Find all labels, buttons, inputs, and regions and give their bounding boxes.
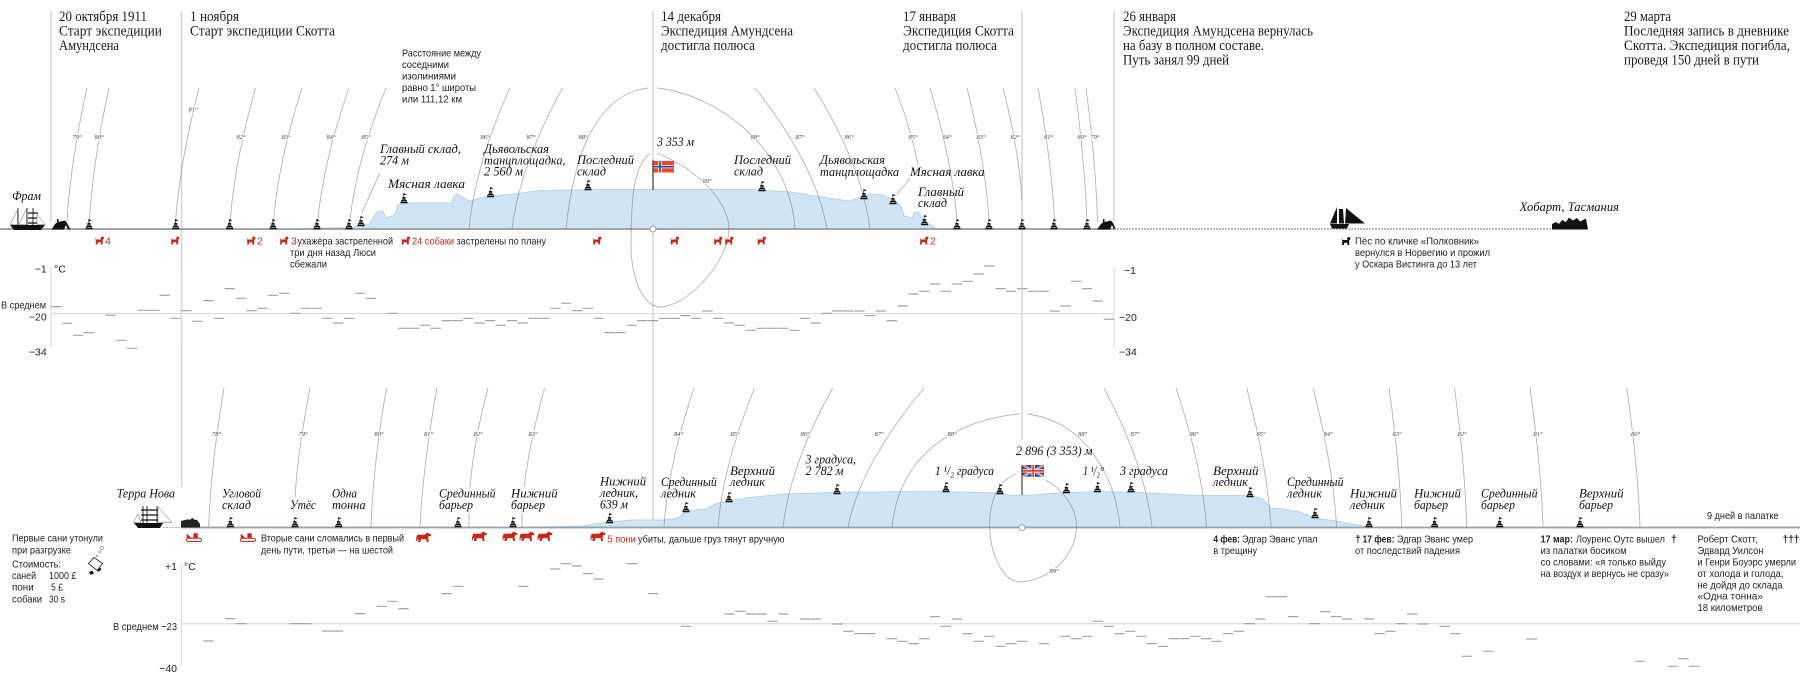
- heading: 14 декабря: Экспедиция Амундсена: [661, 24, 793, 40]
- note: sunk sledge and costs: [12, 533, 104, 605]
- latitude labels: Scott: 87°: [874, 431, 884, 438]
- chart: Scott temperature: [113, 561, 1800, 675]
- latitude labels: Amundsen: 84°: [326, 134, 336, 141]
- latitude isolines: Scott: [209, 388, 1640, 582]
- latitude labels: Scott: 82°: [473, 431, 483, 438]
- heading: 17 января: достигла полюса: [903, 38, 998, 54]
- baseline: Scott: [181, 526, 1800, 528]
- axis labels: Amundsen temperature: [1, 264, 1137, 358]
- dog losses row: Amundsen: сбежали: [290, 258, 327, 270]
- icon: Norway flag: [653, 160, 674, 190]
- note: sunk sledge and costs: Первые сани утонули: [12, 533, 103, 545]
- route place names: Scott: барьер: [1414, 498, 1448, 512]
- route place names: Scott: ледник: [1286, 486, 1322, 500]
- note: 17 March: из палатки босиком: [1541, 545, 1627, 557]
- note: dog Colonel: вернулся в Норвегию и прожил: [1355, 247, 1490, 259]
- latitude labels: Amundsen: 87°: [526, 134, 536, 141]
- latitude labels: Amundsen: 86°: [480, 134, 490, 141]
- route place names: Scott: 2 782 м: [806, 464, 844, 478]
- temperature dashes left part: [51, 289, 604, 348]
- route place names: Scott: Срединный: [439, 487, 496, 501]
- axis labels: Amundsen temperature: −1: [35, 264, 47, 276]
- note: 4 February: в трещину: [1213, 545, 1258, 557]
- dog losses row: Amundsen: 3: [291, 236, 297, 248]
- heading: 20 октября 1911: Старт экспедиции: [59, 24, 162, 40]
- axis labels: Amundsen temperature: −20: [1119, 312, 1137, 324]
- icon: base hut right: [1097, 219, 1116, 230]
- note: sunk sledge and costs: при разгрузке: [12, 544, 71, 556]
- note: 4 February: Эдгар Эванс упал: [1242, 533, 1318, 545]
- route place names: Amundsen: танцплощадка,: [484, 154, 566, 168]
- latitude labels: Amundsen: 88°: [578, 134, 588, 141]
- route place names: Scott: 3 градуса: [1119, 464, 1168, 478]
- latitude labels: Scott: 86°: [1189, 431, 1199, 438]
- heading: 1 ноября: Старт экспедиции Скотта: [190, 24, 336, 40]
- heading: 20 октября 1911: Амундсена: [59, 38, 119, 54]
- route place names: Amundsen: склад: [918, 196, 947, 210]
- note: 17 March: на воздух и вернусь не сразу»: [1541, 568, 1669, 580]
- latitude labels: Scott: 89°: [1049, 568, 1059, 575]
- heading: 17 января: Экспедиция Скотта: [903, 24, 1015, 40]
- route place names: Scott: 2 896 (3 353) м: [1016, 444, 1093, 458]
- note: 17 February: †: [1355, 533, 1361, 545]
- note: distance between isolines: изолиниями: [402, 70, 456, 82]
- route place names: Scott: 1 ¹/₂ градуса: [935, 464, 994, 478]
- heading: 20 октября 1911: 20 октября 1911: [59, 9, 147, 25]
- route place names: Amundsen: Главный: [917, 185, 965, 199]
- icon: ship Terra Nova: [133, 506, 181, 528]
- axis labels: Amundsen temperature: −34: [29, 346, 47, 358]
- heading: 20 октября 1911: [59, 9, 162, 54]
- dog losses row: Amundsen: 2: [930, 236, 936, 248]
- sledge and pony losses: [186, 532, 785, 556]
- icon: base hut left: [52, 219, 70, 230]
- icon: ship Fram: [0, 208, 51, 230]
- icon: ship returning: [1330, 207, 1365, 228]
- latitude labels: Scott: 85°: [1256, 431, 1266, 438]
- note: dog Colonel: [1342, 236, 1490, 270]
- route place names: Scott: Нижний: [510, 487, 558, 501]
- note: distance between isolines: или 111,12 км: [402, 94, 462, 106]
- terrain profile: Amundsen: [268, 190, 937, 229]
- axis labels: Amundsen temperature: −34: [1119, 346, 1137, 358]
- latitude labels: Amundsen: 83°: [281, 134, 291, 141]
- heading: 26 января: Путь занял 99 дней: [1123, 52, 1229, 68]
- route place names: Scott: [117, 444, 1624, 512]
- note: 17 February: 17 фев:: [1363, 533, 1394, 545]
- route place names: Amundsen: Фрам: [12, 189, 41, 203]
- route place names: Scott: 1 ¹/₂°: [1083, 464, 1104, 478]
- note: sunk sledge and costs: 5 £: [51, 582, 63, 594]
- note: 17 March: †: [1671, 533, 1677, 545]
- axis labels: Scott temperature: −40: [159, 663, 177, 675]
- sledge and pony losses: убиты, дальше груз тянут вручную: [638, 533, 785, 545]
- latitude labels: Amundsen: 85°: [361, 134, 371, 141]
- panel: Scott route: [12, 388, 1800, 614]
- dog losses row: Amundsen: застрелены по плану: [456, 236, 547, 248]
- route place names: Amundsen: Главный склад,: [379, 142, 461, 156]
- heading: 1 ноября: [190, 9, 336, 40]
- latitude labels: Scott: [212, 431, 1640, 575]
- heading: 29 марта: [1624, 9, 1790, 68]
- latitude labels: Scott: 86°: [800, 431, 810, 438]
- note: distance between isolines: [402, 48, 482, 106]
- heading: 29 марта: 29 марта: [1624, 9, 1671, 25]
- temperature dashes right part: [605, 266, 1114, 333]
- icon: UK flag: [1022, 465, 1044, 495]
- note: distance between isolines: соседними: [402, 59, 449, 71]
- route place names: Amundsen: склад: [734, 164, 763, 178]
- note: tent days: 9 дней в палатке: [1707, 510, 1779, 522]
- note: final deaths: «Одна тонна»: [1698, 591, 1763, 603]
- note: final deaths: от холода и голода,: [1698, 568, 1784, 580]
- route place names: Amundsen: 2 560 м: [484, 164, 523, 178]
- note: sunk sledge and costs: собаки: [12, 593, 42, 605]
- axis labels: Amundsen temperature: −1: [1124, 265, 1136, 277]
- latitude labels: Scott: 81°: [1533, 431, 1543, 438]
- latitude labels: Scott: 88°: [1078, 431, 1088, 438]
- note: final deaths: Роберт Скотт,: [1698, 533, 1758, 545]
- heading: 17 января: 17 января: [903, 9, 956, 25]
- latitude labels: Amundsen: 80°: [1077, 134, 1087, 141]
- route place names: Scott: барьер: [511, 498, 545, 512]
- latitude labels: Amundsen: 82°: [236, 134, 246, 141]
- latitude labels: Amundsen: 82°: [1010, 134, 1020, 141]
- note: 17 February: от последствий падения: [1355, 545, 1460, 557]
- route place names: Scott: Нижний: [1349, 487, 1398, 501]
- route place names: Amundsen: Мясная лавка: [909, 165, 985, 179]
- sledge and pony losses: день пути, третьи — на шестой: [261, 544, 393, 556]
- note: sunk sledge and costs: Стоимость:: [12, 558, 61, 570]
- latitude labels: Scott: 82°: [1457, 431, 1467, 438]
- sea route to Hobart: [1114, 200, 1619, 230]
- icon: pole marker Amundsen: [650, 226, 656, 232]
- heading: 14 декабря: 14 декабря: [661, 9, 721, 25]
- latitude labels: Scott: 84°: [674, 431, 683, 438]
- sledge and pony losses: 5 пони: [608, 533, 636, 545]
- note: 4 February: 4 фев:: [1213, 533, 1240, 545]
- note: 17 February: Эдгар Эванс умер: [1397, 533, 1473, 545]
- latitude labels: Scott: 80°: [1631, 431, 1640, 438]
- route place names: Amundsen: 274 м: [380, 154, 409, 168]
- note: 17 March: со словами: «я только выйду: [1541, 556, 1667, 568]
- route place names: Amundsen: Последний: [576, 153, 635, 167]
- axis labels: Amundsen temperature: −20: [29, 312, 47, 324]
- latitude labels: Amundsen: 84°: [942, 134, 952, 141]
- latitude labels: Scott: 87°: [1130, 431, 1140, 438]
- route place names: Scott: барьер: [439, 498, 473, 512]
- route place names: Amundsen: [12, 135, 985, 210]
- route place names: Amundsen: Дьявольская: [483, 142, 549, 156]
- route place names: Amundsen: Дьявольская: [819, 153, 885, 167]
- timeline: vertical date guide lines: [51, 11, 1114, 520]
- route place names: Amundsen: склад: [577, 164, 606, 178]
- heading: 26 января: [1123, 9, 1313, 68]
- heading: 26 января: 26 января: [1123, 9, 1176, 25]
- note: 17 March: [1541, 533, 1677, 580]
- note: distance between isolines: Расстояние между: [402, 48, 482, 60]
- latitude labels: Amundsen: 83°: [976, 134, 986, 141]
- route place names: Scott: склад: [222, 498, 251, 512]
- panel: Amundsen route: [0, 88, 1619, 307]
- route place names: Scott: ледник: [660, 486, 696, 500]
- heading: 29 марта: Скотта. Экспедиция погибла,: [1624, 38, 1790, 54]
- route place names: Scott: 3 градуса,: [805, 452, 856, 466]
- route place names: Scott: барьер: [1579, 498, 1613, 512]
- route place names: Scott: Срединный: [661, 475, 717, 489]
- icon: pole marker Scott: [1019, 524, 1025, 530]
- terrain profile: Scott: [536, 492, 1368, 527]
- heading: 17 января: [903, 9, 1015, 54]
- latitude labels: Amundsen: 86°: [844, 134, 854, 141]
- note: final deaths: Эдвард Уилсон: [1698, 545, 1764, 557]
- axis labels: Amundsen temperature: °C: [54, 264, 66, 276]
- dog losses row: Amundsen: 4: [105, 236, 111, 248]
- route place names: Scott: 639 м: [600, 498, 628, 512]
- note: sunk sledge and costs: 1000 £: [49, 570, 77, 582]
- dog losses row: Amundsen: три дня назад Люси: [290, 247, 376, 259]
- icon: base hut Scott: [181, 518, 200, 528]
- latitude labels: Scott: 79°: [298, 431, 308, 438]
- note: sunk sledge and costs: саней: [12, 570, 36, 582]
- route place names: Amundsen: 3 353 м: [656, 135, 694, 149]
- latitude labels: Amundsen: 87°: [795, 134, 805, 141]
- note: final deaths: 18 километров: [1698, 602, 1763, 614]
- latitude isolines: Amundsen: [67, 88, 1098, 307]
- heading: 26 января: Экспедиция Амундсена вернулась: [1123, 24, 1313, 40]
- note: dog Colonel: Пёс по кличке «Полковник»: [1355, 236, 1479, 248]
- route place names: Scott: ледник: [729, 475, 765, 489]
- icon: sunk sledge: [88, 546, 104, 575]
- route place names: Scott: Одна: [332, 487, 357, 501]
- note: 17 March: 17 мар:: [1541, 533, 1573, 545]
- route place names: Scott: ледник: [1212, 475, 1248, 489]
- route place names: Scott: барьер: [1481, 498, 1515, 512]
- axis labels: Amundsen temperature: В среднем: [1, 300, 46, 312]
- temperature dashes segment two: [627, 564, 1200, 646]
- route place names: Amundsen: танцплощадка: [820, 165, 899, 179]
- heading: 1 ноября: 1 ноября: [190, 9, 239, 25]
- latitude labels: Amundsen: 81°: [188, 106, 198, 114]
- depots: Scott: [227, 482, 1584, 527]
- route place names: Scott: Утёс: [290, 498, 316, 512]
- latitude labels: Amundsen: 80°: [94, 134, 104, 141]
- note: sunk sledge and costs: 30 s: [49, 593, 65, 605]
- latitude labels: Amundsen: 81°: [1044, 134, 1053, 141]
- route place names: Scott: Срединный: [1287, 475, 1344, 489]
- route place names: Scott: Нижний: [1413, 487, 1462, 501]
- route place names: Scott: Верхний: [730, 464, 776, 478]
- heading: 14 декабря: [661, 9, 793, 54]
- latitude labels: Amundsen: 89°: [702, 178, 712, 185]
- latitude labels: Scott: 80°: [374, 431, 384, 438]
- temperature dashes segment three: [1201, 597, 1699, 666]
- heading: 29 марта: проведя 150 дней в пути: [1624, 52, 1759, 68]
- axis labels: Scott temperature: В среднем −23: [113, 621, 177, 633]
- latitude labels: Scott: 83°: [1392, 431, 1402, 438]
- label: Hobart: Хобарт, Тасмания: [1519, 200, 1619, 214]
- latitude labels: Amundsen: [72, 106, 1100, 185]
- route place names: Amundsen: Мясная лавка: [387, 177, 465, 191]
- note: final deaths: [1698, 533, 1800, 614]
- latitude labels: Scott: 84°: [1323, 431, 1333, 438]
- heading: 26 января: на базу в полном составе.: [1123, 38, 1264, 54]
- route place names: Amundsen: Последний: [733, 153, 792, 167]
- temperature dashes segment one: [203, 564, 604, 641]
- note: 17 February: [1355, 533, 1473, 557]
- baseline: Amundsen: [0, 228, 1114, 230]
- axis labels: Scott temperature: [113, 561, 196, 675]
- route place names: Scott: Угловой: [222, 487, 262, 501]
- latitude labels: Scott: 85°: [730, 431, 740, 438]
- dog losses row: Amundsen: ухажёра застреленной: [298, 236, 393, 248]
- route place names: Scott: ледник: [1349, 498, 1385, 512]
- dog losses row: Amundsen: 24 собаки: [412, 236, 454, 248]
- dog losses row: Amundsen: [95, 236, 936, 270]
- route place names: Scott: Срединный: [1481, 487, 1538, 501]
- route place names: Scott: Терра Нова: [117, 487, 175, 501]
- note: distance between isolines: равно 1° широты: [402, 82, 476, 94]
- sledge and pony losses: Вторые сани сломались в первый: [261, 533, 404, 545]
- note: final deaths: не дойдя до склада: [1698, 579, 1783, 591]
- note: 4 February: [1213, 533, 1318, 557]
- latitude labels: Amundsen: 85°: [908, 134, 918, 141]
- route place names: Scott: тонна: [332, 498, 366, 512]
- latitude labels: Scott: 83°: [528, 431, 538, 438]
- route place names: Scott: Верхний: [1213, 464, 1259, 478]
- chart: Amundsen temperature: [1, 264, 1137, 358]
- note: 17 March: Лоуренс Оутс вышел: [1576, 533, 1665, 545]
- latitude labels: Amundsen: 88°: [750, 134, 760, 141]
- latitude labels: Scott: 88°: [947, 431, 957, 438]
- heading: 14 декабря: достигла полюса: [661, 38, 756, 54]
- dog losses row: Amundsen: 2: [257, 236, 263, 248]
- latitude labels: Amundsen: 79°: [72, 134, 82, 141]
- route place names: Scott: ледник,: [599, 486, 638, 500]
- latitude labels: Amundsen: 79°: [1090, 134, 1100, 141]
- depots: Amundsen: [85, 180, 1091, 229]
- route place names: Scott: Верхний: [1579, 487, 1624, 501]
- note: dog Colonel: у Оскара Вистинга до 13 лет: [1355, 258, 1477, 270]
- route place names: Scott: Нижний: [599, 475, 647, 489]
- latitude labels: Scott: 81°: [424, 431, 434, 438]
- note: final deaths: †††: [1782, 533, 1800, 545]
- icon: Hobart town: [1552, 218, 1588, 230]
- note: sunk sledge and costs: пони: [12, 582, 34, 594]
- axis labels: Scott temperature: +1: [165, 561, 177, 573]
- latitude labels: Scott: 78°: [212, 431, 222, 438]
- axis labels: Scott temperature: °C: [184, 561, 196, 573]
